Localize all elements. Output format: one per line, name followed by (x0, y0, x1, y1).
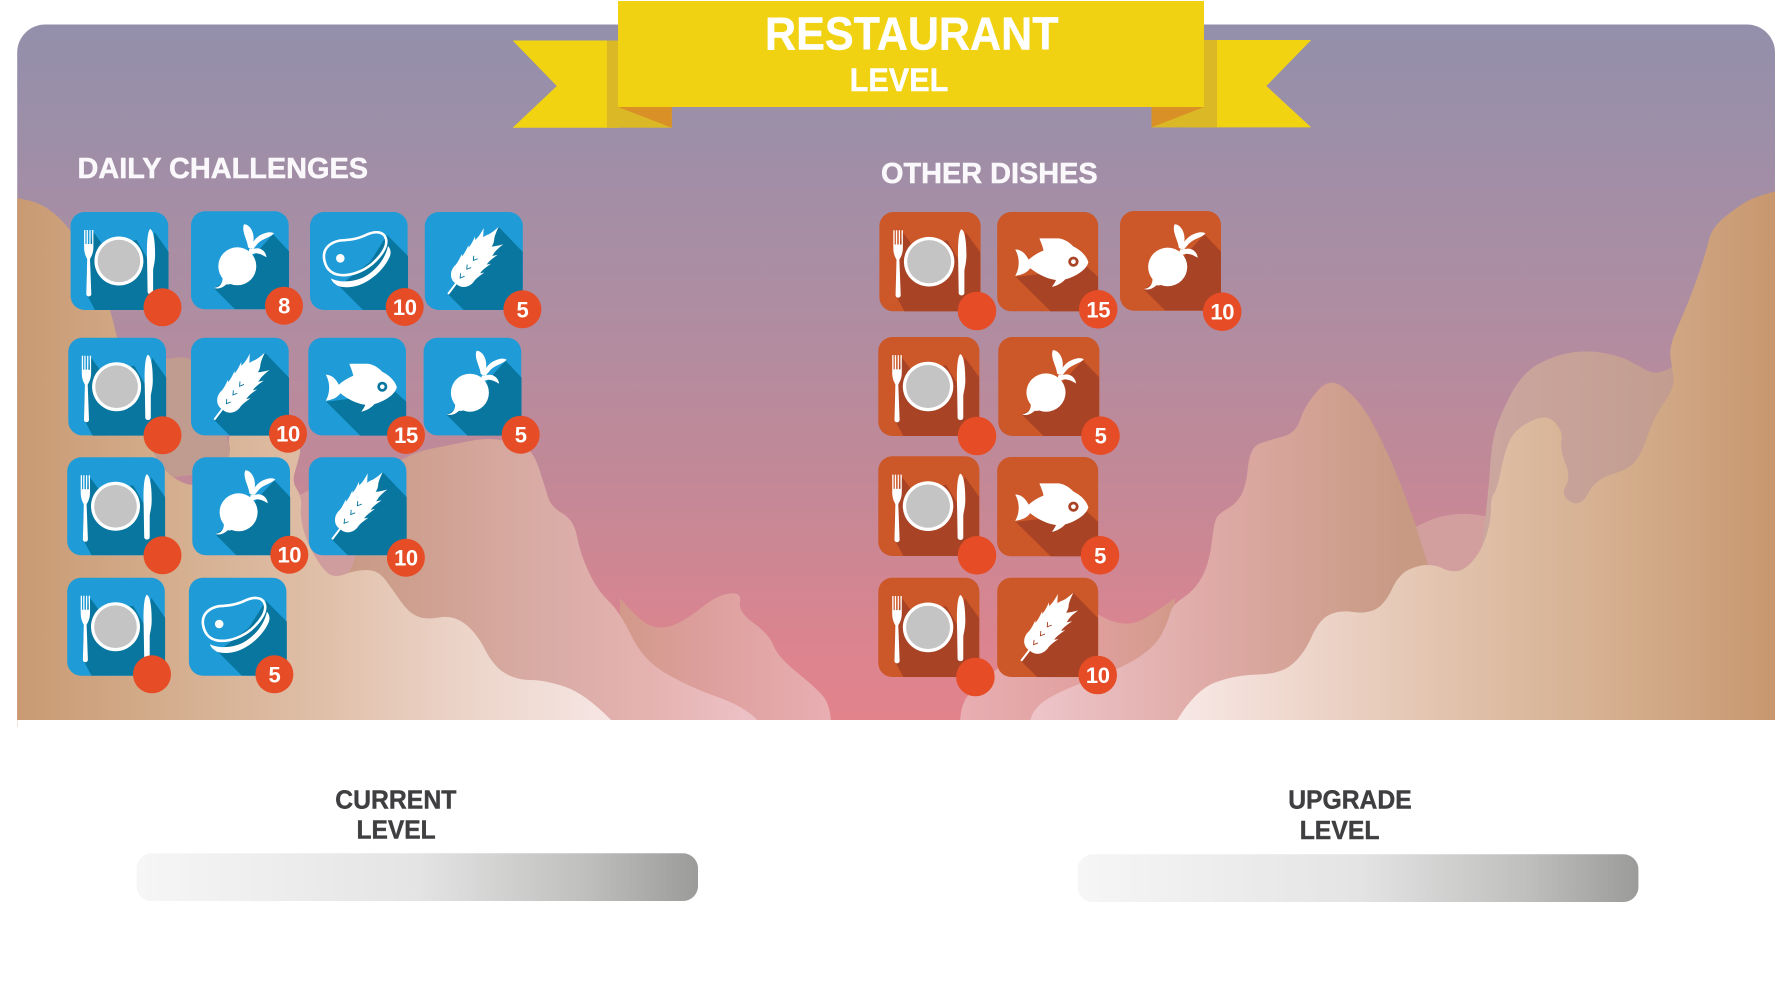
ribbon banner (513, 1, 1311, 128)
tile: wheat 10 (191, 338, 307, 453)
label: upgrade level: UPGRADE (1288, 787, 1412, 815)
panel: daily challenge tiles (67, 211, 541, 693)
tile: fish 15: 15 (394, 423, 418, 448)
ribbon right tail (1190, 40, 1311, 127)
tile: steak 5 (189, 578, 293, 693)
tile: orange wheat 10: 10 (1086, 663, 1110, 688)
panel: other dishes tiles (878, 211, 1241, 696)
tile: steak 10: 10 (393, 295, 417, 320)
tile: turnip 5 (424, 338, 540, 454)
tile: turnip 8: 8 (278, 294, 290, 319)
tile: turnip 8 (191, 211, 303, 325)
left hill (154, 357, 230, 477)
bar: upgrade level (1078, 854, 1638, 902)
label: current level: LEVEL (356, 817, 436, 845)
tile: orange plate, row 2 (878, 337, 996, 455)
tile: orange turnip 5: 5 (1095, 424, 1107, 449)
right back blob (1486, 352, 1674, 518)
tile: fish 15 (308, 338, 425, 454)
tile: orange wheat 10 (997, 578, 1117, 694)
tile: wheat 10: 10 (276, 422, 300, 447)
label: current level: CURRENT (335, 787, 457, 815)
tile: wheat 5 (425, 212, 541, 328)
right front cloud (1176, 190, 1780, 722)
left middle cloud (340, 439, 759, 722)
tile: orange turnip 5 (998, 337, 1120, 455)
label: upgrade level: LEVEL (1300, 817, 1380, 845)
tile: plate, row 4 (67, 578, 171, 693)
tile: steak 10 (310, 212, 424, 326)
right pocket (1416, 514, 1486, 572)
tile: plate, row 1 (71, 212, 182, 326)
tile: plate, row 3 (67, 457, 182, 574)
tile: turnip 5: 5 (515, 423, 527, 448)
ribbon main band (618, 1, 1204, 107)
bar: current level (137, 853, 698, 901)
tile: wheat 10, row 3: 10 (394, 546, 418, 571)
left pocket (300, 490, 356, 576)
tile: orange fish 5 (997, 457, 1119, 575)
left pink lobe (620, 593, 831, 722)
tile: orange turnip 10 (1120, 211, 1241, 331)
title: RESTAURANT (765, 8, 1059, 60)
panel edge tick (17, 720, 18, 727)
label: current level (335, 787, 457, 845)
subtitle: LEVEL (850, 62, 948, 98)
tile: wheat 10, row 3 (309, 457, 425, 577)
heading: daily challenges: DAILY CHALLENGES (78, 153, 368, 185)
ribbon right fold (1152, 40, 1217, 127)
ribbon left tail (513, 40, 618, 128)
tile: turnip 10: 10 (277, 543, 301, 568)
tile: orange turnip 10: 10 (1210, 300, 1234, 325)
right pink lobe (960, 593, 1175, 722)
tile: orange fish 5: 5 (1094, 543, 1106, 568)
tile: wheat 5: 5 (516, 297, 528, 322)
heading: other dishes: OTHER DISHES (881, 158, 1098, 190)
panel: illustrated background (17, 24, 1780, 722)
tile: orange plate, row 1 (879, 212, 996, 330)
label: upgrade level (1288, 787, 1412, 845)
tile: orange fish 15 (997, 212, 1117, 329)
ribbon left fold (607, 40, 672, 128)
tile: turnip 10 (192, 457, 308, 574)
tile: orange plate, row 4 (878, 578, 995, 696)
tile: orange fish 15: 15 (1086, 297, 1110, 322)
tile: steak 5: 5 (268, 662, 280, 687)
left front cloud (17, 198, 613, 722)
tile: orange plate, row 3 (878, 456, 996, 575)
tile: plate, row 2 (68, 338, 182, 454)
right middle mountain (1030, 383, 1435, 722)
